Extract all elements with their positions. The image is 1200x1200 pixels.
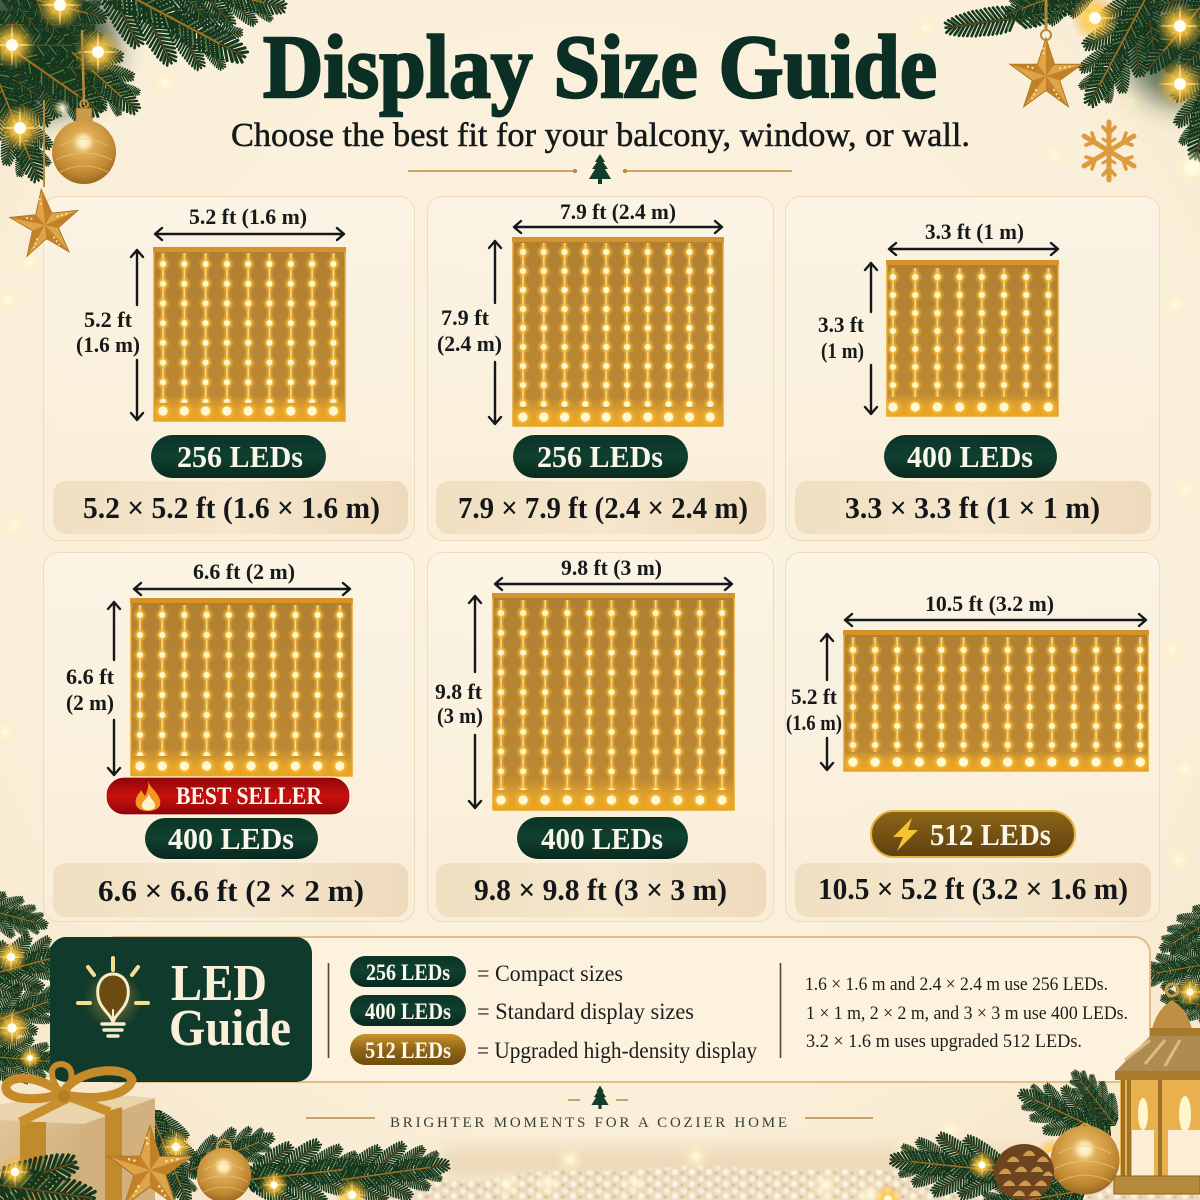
title: Display Size Guide [263, 18, 937, 117]
LED count pill [145, 818, 318, 859]
gold LED count pill [871, 811, 1075, 857]
LED count pill [151, 435, 326, 478]
LED notes: 1.6 × 1.6 m and 2.4 × 2.4 m use 256 LEDs. [805, 974, 1108, 995]
LED count pill: 400 LEDs [168, 821, 294, 856]
height label: 9.8 ft [435, 679, 483, 704]
LED count pill: 400 LEDs [907, 439, 1033, 474]
ornament: gold star top-left [7, 100, 82, 258]
height label: 7.9 ft [441, 305, 490, 330]
height arrow [865, 263, 877, 414]
legend: 256 LEDs: 256 LEDs [366, 960, 450, 985]
best seller badge: BEST SELLER [176, 783, 323, 810]
lantern [1114, 984, 1200, 1194]
subtitle: Choose the best fit for your balcony, window, or wall. [231, 117, 970, 154]
height label: 6.6 ft [66, 664, 115, 689]
curtain lights [492, 593, 735, 810]
footer tagline [306, 1086, 873, 1131]
panel: 7.9 ft curtain [428, 196, 774, 540]
heading text: Guide [169, 1000, 291, 1057]
LED notes [805, 974, 1128, 1052]
best seller badge [106, 777, 350, 815]
LED count pill: 256 LEDs [177, 439, 303, 474]
left side pine tree [0, 881, 85, 1091]
size bar: 7.9 × 7.9 ft (2.4 × 2.4 m) [458, 490, 748, 525]
panel: 10.5 ft curtain [786, 552, 1160, 922]
height label [76, 307, 140, 357]
width label: 6.6 ft (2 m) [193, 559, 295, 584]
gold LED count pill: 512 LEDs [930, 817, 1051, 852]
legend: 512 LEDs: = Upgraded high-density display [477, 1038, 757, 1063]
height label: 5.2 ft [791, 684, 838, 709]
size bar: 3.3 × 3.3 ft (1 × 1 m) [845, 490, 1100, 525]
LED count pill [517, 817, 688, 859]
width arrow [845, 614, 1146, 626]
ornament: gold ball bottom-right [1050, 1124, 1120, 1195]
icon: lightning bolt [893, 818, 918, 851]
legend: 256 LEDs [350, 956, 623, 987]
height label: (1.6 m) [76, 332, 140, 357]
ornament: gold ball top-left [52, 30, 116, 184]
height arrow [108, 602, 120, 775]
height arrow [489, 241, 501, 424]
panel: LED guide [50, 937, 1150, 1082]
curtain lights [886, 260, 1059, 416]
width arrow [514, 221, 722, 233]
panel: 3.3 ft curtain [786, 196, 1160, 540]
LED notes: 1 × 1 m, 2 × 2 m, and 3 × 3 m use 400 LEDs. [806, 1003, 1128, 1024]
bottom-left pine branches [121, 1098, 454, 1200]
width arrow [495, 578, 732, 590]
size bar: 9.8 × 9.8 ft (3 × 3 m) [474, 872, 727, 907]
panel: 5.2 ft curtain [44, 196, 414, 540]
snow ground [380, 1116, 1200, 1200]
size bar [795, 863, 1151, 917]
width label: 10.5 ft (3.2 m) [925, 591, 1054, 616]
gift bow [6, 1064, 132, 1103]
legend: 400 LEDs: = Standard display sizes [477, 999, 694, 1024]
size bar [53, 863, 408, 917]
height label [818, 312, 865, 363]
height arrow [131, 250, 143, 420]
height label: (3 m) [437, 703, 483, 728]
size bar [53, 481, 408, 534]
bottom-left star and ball [0, 1126, 251, 1200]
height label [66, 664, 115, 715]
width arrow [155, 228, 344, 240]
right side pine tree [1137, 889, 1200, 1031]
top-right pine branches [944, 0, 1200, 186]
size bar [795, 481, 1151, 534]
width label: 5.2 ft (1.6 m) [189, 204, 307, 229]
heading text: LED [171, 955, 267, 1012]
size bar [436, 481, 766, 534]
LED guide heading block [50, 937, 312, 1082]
width label: 7.9 ft (2.4 m) [560, 199, 676, 224]
curtain lights [843, 630, 1149, 771]
size bar: 10.5 × 5.2 ft (3.2 × 1.6 m) [818, 871, 1128, 906]
LED count pill [884, 435, 1057, 478]
LED count pill [513, 435, 688, 478]
width label: 3.3 ft (1 m) [925, 219, 1024, 244]
LED count pill: 400 LEDs [541, 821, 663, 856]
height label [435, 679, 483, 728]
height label: 5.2 ft [84, 307, 133, 332]
size bar [436, 863, 766, 917]
icon: light bulb [78, 958, 148, 1036]
pine cone [994, 1144, 1054, 1200]
LED notes: 3.2 × 1.6 m uses upgraded 512 LEDs. [806, 1031, 1082, 1052]
LED count pill: 256 LEDs [537, 439, 663, 474]
legend: 400 LEDs: 400 LEDs [365, 999, 451, 1024]
width arrow [134, 583, 350, 595]
legend: 256 LEDs: = Compact sizes [477, 961, 623, 986]
panel: 6.6 ft curtain best seller [44, 552, 414, 922]
width label: 9.8 ft (3 m) [561, 555, 662, 580]
height label: (1 m) [821, 338, 864, 363]
footer tagline: BRIGHTER MOMENTS FOR A COZIER HOME [390, 1115, 790, 1131]
height label: (2.4 m) [437, 331, 502, 356]
height label [786, 684, 842, 735]
title divider with tree [408, 154, 792, 184]
height label: 3.3 ft [818, 312, 865, 337]
icon: flame [136, 781, 160, 811]
ornament: gold star top-right [1010, 0, 1082, 107]
height label: (2 m) [66, 690, 114, 715]
curtain lights [512, 237, 724, 426]
curtain lights [130, 598, 353, 776]
height label: (1.6 m) [786, 710, 842, 735]
legend: 512 LEDs: 512 LEDs [365, 1038, 451, 1063]
height label [437, 305, 502, 356]
curtain lights [153, 247, 346, 421]
gift box with bow [0, 1064, 155, 1200]
legend: 512 LEDs [350, 1034, 757, 1065]
height arrow [821, 634, 833, 770]
height arrow [469, 596, 481, 808]
size bar: 5.2 × 5.2 ft (1.6 × 1.6 m) [83, 490, 380, 525]
legend: 400 LEDs [350, 995, 694, 1026]
width arrow [889, 243, 1058, 255]
panel: 9.8 ft curtain [428, 552, 774, 922]
icon: snowflake [1084, 122, 1134, 180]
bottom-right pine branches [874, 1058, 1132, 1200]
heading text [169, 955, 291, 1057]
size bar: 6.6 × 6.6 ft (2 × 2 m) [98, 873, 364, 908]
top-left pine branches [0, 0, 295, 196]
